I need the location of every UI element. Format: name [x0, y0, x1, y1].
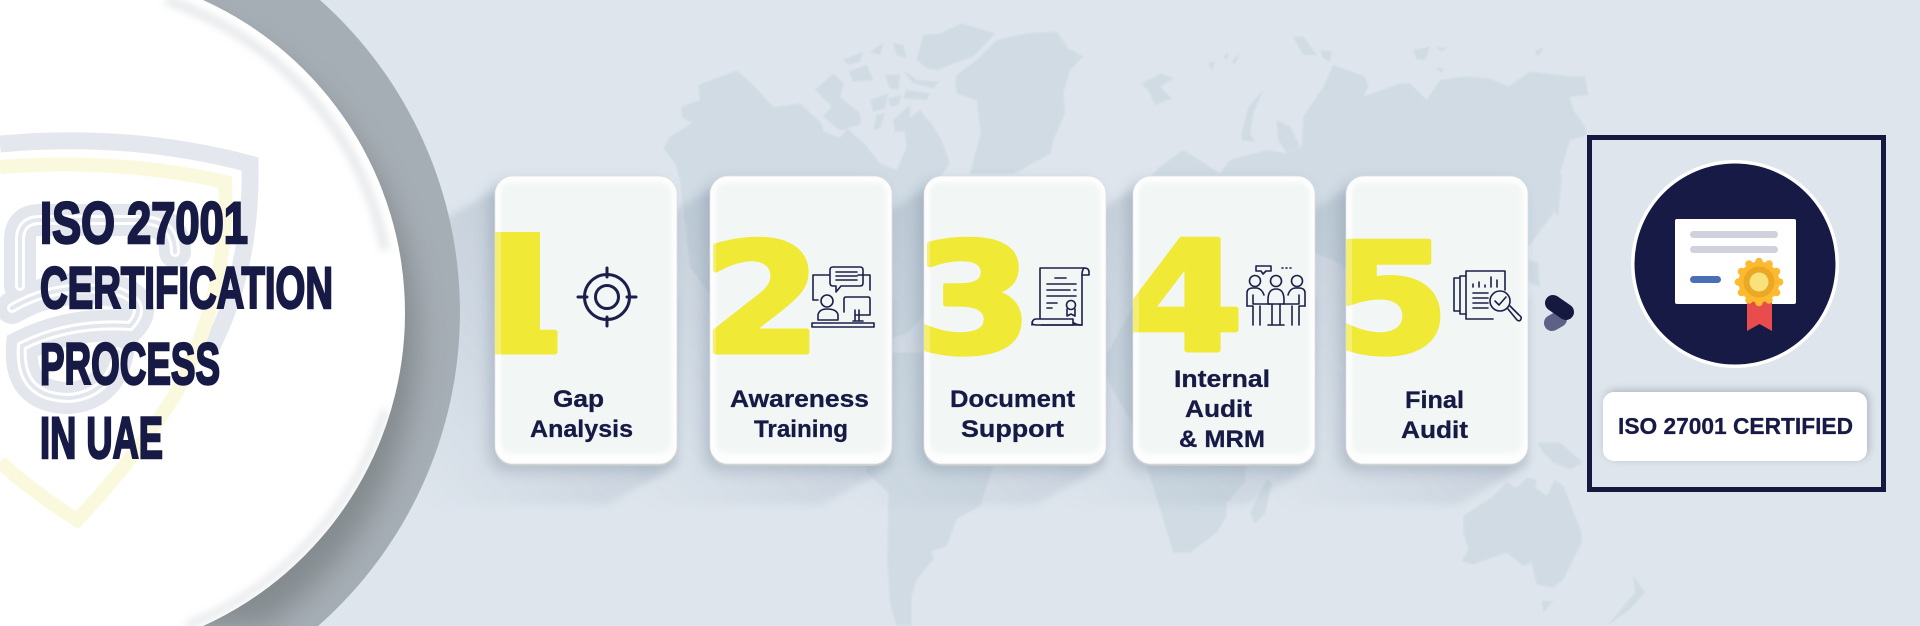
label: internal audit and mrm [1174, 366, 1270, 453]
japan and philippines [1543, 163, 1562, 217]
label: document support [950, 386, 1075, 443]
card 4: internal audit and mrm [1124, 176, 1315, 471]
greenland [955, 32, 1083, 174]
certified label [1603, 390, 1869, 461]
label: awareness training: Awareness [730, 386, 869, 413]
australia [1462, 478, 1645, 625]
seal [1735, 258, 1783, 306]
icon: trainer at desk [812, 267, 874, 327]
card 3: document support [913, 176, 1106, 471]
title: IN UAE [40, 406, 163, 471]
label: gap analysis: Gap [553, 386, 604, 413]
numeral 1: 1 [447, 211, 567, 389]
certificate sheet [1675, 219, 1796, 304]
label: internal audit and mrm: Internal [1174, 366, 1270, 393]
label: final audit [1401, 387, 1468, 444]
label: final audit: Audit [1401, 417, 1468, 444]
numeral 5: 5 [1330, 211, 1450, 389]
new guinea [1537, 443, 1583, 469]
title: ISO 27001 [40, 191, 248, 256]
grey outer disc [0, 0, 460, 626]
long card shadows [425, 190, 1528, 505]
white inner disc [0, 0, 405, 626]
certified label: ISO 27001 CERTIFIED [1618, 413, 1853, 439]
certificate badge circle [1631, 160, 1839, 368]
icon: report with magnifier [1454, 271, 1521, 321]
numeral 2: 2 [702, 211, 822, 389]
south america [867, 353, 993, 625]
numeral 1 [495, 232, 558, 354]
title: CERTIFICATION [40, 256, 333, 321]
disc shadow [204, 74, 428, 626]
shield watermark [0, 141, 250, 520]
label: internal audit and mrm: Audit [1185, 396, 1252, 423]
label: gap analysis: Analysis [530, 416, 633, 443]
title [40, 191, 333, 471]
label: awareness training [730, 386, 869, 443]
panel: certified frame [1590, 138, 1884, 490]
africa [1100, 303, 1293, 553]
eurasia [1140, 37, 1588, 300]
label: internal audit and mrm: & MRM [1179, 426, 1265, 453]
left circular title panel [0, 0, 460, 626]
label: gap analysis [530, 386, 633, 443]
title: PROCESS [40, 332, 220, 397]
icon: scroll document [1032, 268, 1089, 325]
ribbon [1747, 295, 1772, 331]
label: awareness training: Training [754, 416, 848, 443]
numeral 3: 3 [913, 211, 1033, 389]
icon: target [578, 268, 636, 326]
madagascar [1250, 479, 1272, 524]
arrow [1552, 303, 1566, 323]
card 5: final audit [1330, 176, 1528, 471]
label: document support: Document [950, 386, 1075, 413]
card 2: awareness training [702, 176, 892, 471]
card 1: gap analysis [484, 176, 678, 476]
label: final audit: Final [1405, 387, 1464, 414]
numeral 4: 4 [1124, 209, 1244, 387]
icon: meeting [1247, 266, 1305, 325]
world map [663, 23, 1645, 625]
north america [663, 23, 995, 393]
label: document support: Support [961, 416, 1064, 443]
